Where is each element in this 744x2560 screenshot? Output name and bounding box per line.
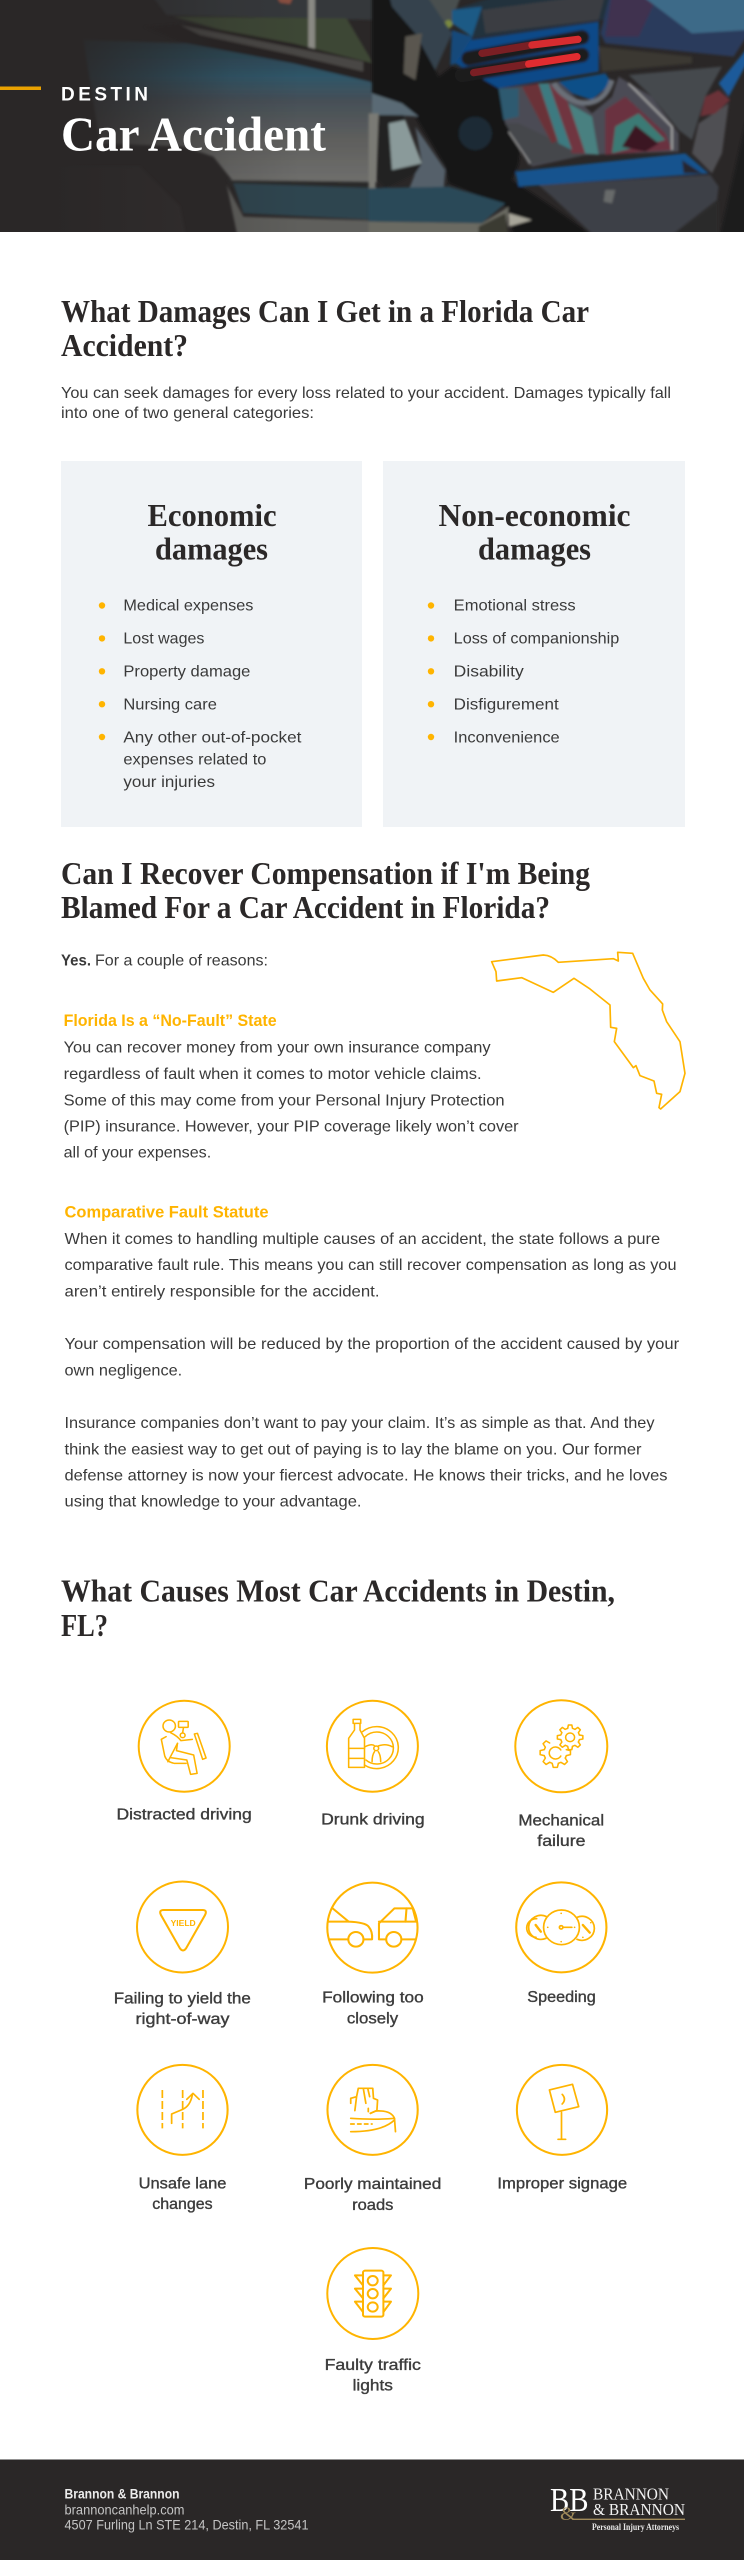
body text: no-fault: (PIP) insurance. However, your PIP coverage likely won’t cover <box>64 1119 519 1136</box>
list: non-economic damages: Disfigurement <box>454 696 559 714</box>
body text: no-fault: You can recover money from your own insurance company <box>64 1040 491 1057</box>
footer logo: BB <box>550 2482 588 2519</box>
subheading: no-fault: Florida Is a “No-Fault” State <box>64 1012 277 1030</box>
cause: improper signage <box>497 2065 627 2192</box>
body text: comparative fault: When it comes to handling multiple causes of an accident, the state follows a pure <box>64 1231 660 1248</box>
panel heading: economic <box>148 497 276 566</box>
list: non-economic damages <box>428 598 619 746</box>
list: economic damages <box>99 598 302 791</box>
panel: non-economic damages <box>383 461 685 827</box>
body text: comparative fault: using that knowledge to your advantage. <box>64 1494 362 1511</box>
label: unsafe lane changes: Unsafe lane <box>139 2175 226 2192</box>
label: unsafe lane changes: changes <box>152 2196 213 2213</box>
list: economic damages: Medical expenses <box>123 598 253 614</box>
heading: damages: What Damages Can I Get in a Florida Car <box>61 293 589 329</box>
footer logo: Personal Injury Attorneys <box>592 2523 679 2533</box>
label: poorly maintained roads: roads <box>352 2197 394 2214</box>
body text: comparative fault: defense attorney is now your fiercest advocate. He knows their tricks, and he loves <box>64 1468 668 1485</box>
icon: two cars <box>326 1883 420 1973</box>
cause: failing to yield <box>114 1882 251 2028</box>
footer logo <box>550 2482 685 2533</box>
hero title: Car Accident <box>61 109 326 162</box>
label: distracted driving: Distracted driving <box>116 1806 252 1823</box>
heading: causes: FL? <box>61 1607 108 1643</box>
footer logo: BRANNON <box>593 2484 669 2503</box>
panel heading: non-economic: Non-economic <box>438 497 630 533</box>
body text: comparative fault <box>64 1231 680 1511</box>
body text: comparative fault: think the easiest way to get out of paying is to lay the blame on you. Our former <box>64 1441 642 1458</box>
label: speeding: Speeding <box>527 1989 596 2006</box>
label: failing to yield: Failing to yield the <box>114 1990 251 2007</box>
yes statement: For a couple of reasons: <box>95 953 268 970</box>
footer logo: & BRANNON <box>593 2500 685 2519</box>
body text: comparative fault: Insurance companies don’t want to pay your claim. It’s as simple as that. And they <box>64 1415 654 1432</box>
icon: speedometer <box>516 1882 606 1972</box>
label: poorly maintained roads: Poorly maintained <box>304 2176 441 2193</box>
subheading: comparative fault: Comparative Fault Statute <box>64 1203 268 1221</box>
label: following too closely: Following too <box>322 1990 424 2007</box>
cause: poorly maintained roads <box>304 2065 441 2214</box>
yes statement: Yes. <box>61 953 91 970</box>
label: faulty traffic lights <box>325 2357 421 2395</box>
panel heading: economic: Economic <box>148 497 276 533</box>
hero accent line <box>0 86 41 90</box>
body text: no-fault: Some of this may come from your Personal Injury Protection <box>64 1092 505 1109</box>
icon: bottle and steering wheel <box>327 1701 418 1792</box>
heading: causes <box>61 1573 615 1643</box>
label: failing to yield <box>114 1990 251 2028</box>
heading: recover compensation: Blamed For a Car Accident in Florida? <box>61 889 550 925</box>
label: failing to yield: right-of-way <box>136 2011 230 2028</box>
label: following too closely <box>322 1990 424 2027</box>
cause: drunk driving <box>321 1701 425 1828</box>
icon: cliff road <box>327 2065 418 2155</box>
footer contact details <box>64 2485 309 2533</box>
list: economic damages: Any other out-of-pocket <box>123 730 302 746</box>
subsection: no-fault state <box>64 1012 519 1162</box>
footer contact details: brannoncanhelp.com <box>64 2501 184 2517</box>
icon: Florida outline <box>492 952 685 1109</box>
label: faulty traffic lights: Faulty traffic <box>325 2357 421 2374</box>
list: economic damages: your injuries <box>123 774 215 791</box>
label: drunk driving: Drunk driving <box>321 1811 425 1828</box>
intro paragraph: You can seek damages for every loss related to your accident. Damages typically fall <box>61 385 671 402</box>
list: economic damages: Property damage <box>123 664 251 680</box>
body text: no-fault <box>64 1040 519 1162</box>
panel heading: non-economic <box>438 497 630 566</box>
list: non-economic damages: Loss of companionship <box>454 630 619 648</box>
footer <box>0 2460 744 2560</box>
heading: damages: Accident? <box>61 327 188 363</box>
label: unsafe lane changes <box>139 2175 226 2213</box>
body text: comparative fault: own negligence. <box>64 1362 182 1379</box>
list: non-economic damages: Inconvenience <box>454 730 560 746</box>
heading: recover compensation: Can I Recover Compensation if I'm Being <box>61 855 590 891</box>
cause: mechanical failure <box>515 1700 607 1850</box>
label: mechanical failure: failure <box>537 1833 586 1850</box>
cause: speeding <box>516 1882 606 2006</box>
cause: faulty traffic lights <box>325 2248 421 2395</box>
icon: crooked sign <box>517 2065 607 2155</box>
cause: following too closely <box>322 1883 424 2027</box>
label: mechanical failure <box>518 1813 604 1850</box>
hero photo: crashed cars <box>88 0 744 232</box>
label: improper signage: Improper signage <box>497 2175 627 2192</box>
label: poorly maintained roads <box>304 2176 441 2214</box>
list: non-economic damages: Emotional stress <box>454 598 576 614</box>
footer contact details: Brannon & Brannon <box>64 2485 180 2501</box>
icon: lane change arrow <box>137 2065 228 2155</box>
heading: causes: What Causes Most Car Accidents in Destin, <box>61 1573 615 1609</box>
panel heading: economic: damages <box>155 530 268 566</box>
heading: damages <box>61 293 589 363</box>
icon: gears <box>515 1700 607 1792</box>
body text: comparative fault: comparative fault rule. This means you can still recover compensation as long as you <box>64 1257 676 1274</box>
body text: no-fault: regardless of fault when it comes to motor vehicle claims. <box>64 1066 482 1083</box>
list: non-economic damages: Disability <box>454 664 524 680</box>
cause: distracted driving <box>116 1701 252 1823</box>
panel: economic damages <box>61 461 362 827</box>
label: mechanical failure: Mechanical <box>518 1813 604 1830</box>
body text: comparative fault: Your compensation will be reduced by the proportion of the accident caused by your <box>64 1336 680 1353</box>
label: faulty traffic lights: lights <box>353 2378 393 2395</box>
heading: recover compensation <box>61 855 590 925</box>
subsection: comparative fault <box>64 1203 680 1511</box>
footer logo: & <box>560 2504 577 2525</box>
panel heading: non-economic: damages <box>478 530 591 566</box>
list: economic damages: Nursing care <box>123 696 217 714</box>
body text: no-fault: all of your expenses. <box>64 1145 211 1162</box>
cause: unsafe lane changes <box>137 2065 228 2213</box>
list: economic damages: Lost wages <box>123 630 204 648</box>
icon: traffic light <box>327 2248 418 2339</box>
footer contact details: 4507 Furling Ln STE 214, Destin, FL 32541 <box>64 2517 309 2533</box>
hero banner <box>0 0 744 240</box>
body text: comparative fault: aren’t entirely responsible for the accident. <box>64 1283 380 1300</box>
icon: yield sign <box>137 1882 228 1972</box>
hero eyebrow: DESTIN <box>61 85 148 106</box>
label: following too closely: closely <box>347 2010 398 2027</box>
icon: distracted driver <box>139 1701 230 1792</box>
intro paragraph <box>61 385 671 422</box>
icon: yield sign: YIELD <box>171 1918 196 1928</box>
list: economic damages: expenses related to <box>123 752 266 769</box>
intro paragraph: into one of two general categories: <box>61 405 314 422</box>
